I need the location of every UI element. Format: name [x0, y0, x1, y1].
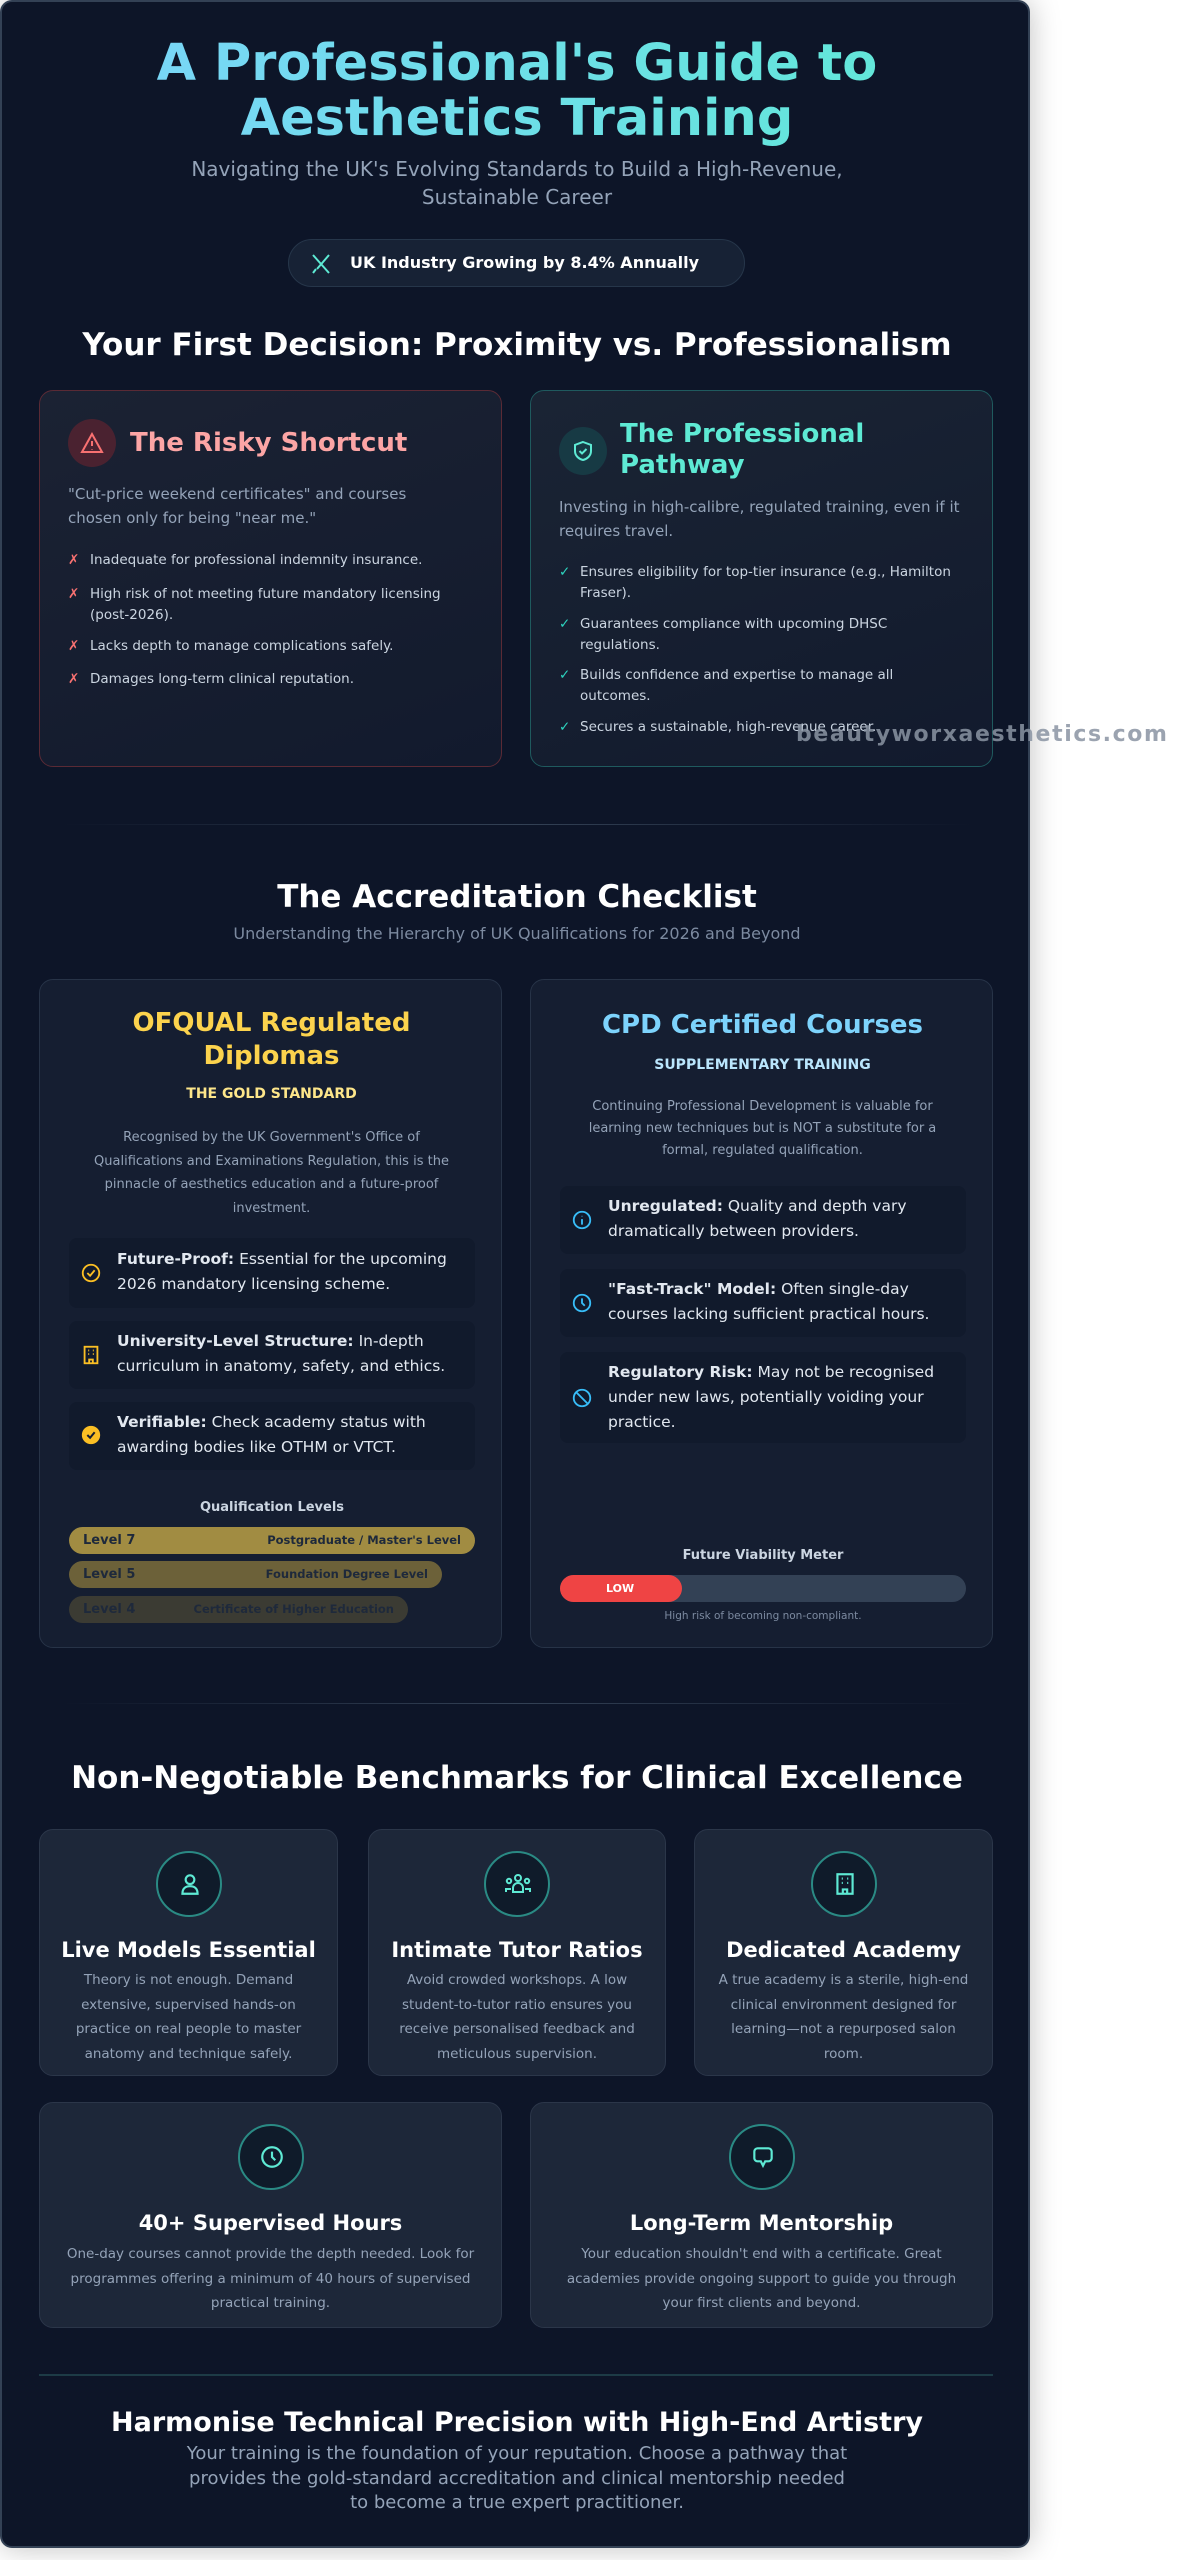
panel: professional pathway: Pathway: [620, 450, 745, 480]
panel: risky shortcut: "Cut-price weekend certificates" and courses chosen only for being "near me.": [68, 485, 406, 527]
feature: regulatory risk: [560, 1352, 966, 1443]
feature: regulatory risk: Regulatory Risk: May not be recognised under new laws, potentially voiding your practice.: [608, 1363, 934, 1431]
list: benefits: Ensures eligibility for top-tier insurance (e.g., Hamilton Fraser).: [580, 564, 951, 601]
list: benefits: ✓: [559, 616, 570, 632]
list: risks: ✗: [68, 586, 79, 602]
badge: industry growth: [288, 239, 745, 287]
footer text: Your training is the foundation of your reputation. Choose a pathway that provides the gold-standard accreditation and clinical mentorship needed to become a true expert practitioner.: [187, 2443, 847, 2513]
chart: qualification levels: Qualification Levels: [200, 1500, 344, 1515]
chart: qualification levels: Foundation Degree Level: [266, 1567, 428, 1581]
icon: shield: [559, 427, 607, 475]
list: risks: Lacks depth to manage complications safely.: [90, 638, 393, 654]
panel: OFQUAL: Diplomas: [204, 1041, 340, 1071]
chart: viability meter: Future Viability Meter: [683, 1548, 843, 1563]
card: mentorship: Your education shouldn't end with a certificate. Great academies provide ongoing support to guide you through your first clients and beyond.: [567, 2246, 956, 2311]
title: A Professional's Guide to: [157, 34, 877, 93]
panel: CPD: Continuing Professional Development is valuable for learning new techniques but is NOT a substitute for a formal, regulated qualification.: [589, 1099, 936, 1158]
panel: professional pathway: Investing in high-calibre, regulated training, even if it requires travel.: [559, 498, 960, 540]
footer heading: Harmonise Technical Precision with High-End Artistry: [111, 2407, 923, 2438]
list: risks: ✗: [68, 638, 79, 654]
chart: qualification levels: Level 5: [83, 1567, 135, 1582]
list: risks: Damages long-term clinical reputation.: [90, 671, 354, 687]
chart: qualification levels: Certificate of Higher Education: [194, 1602, 394, 1616]
list: benefits: ✓: [559, 719, 570, 735]
card: dedicated academy: A true academy is a sterile, high-end clinical environment designed for learning—not a repurposed salon room.: [719, 1972, 968, 2062]
panel: OFQUAL: THE GOLD STANDARD: [186, 1086, 357, 1102]
list: benefits: Secures a sustainable, high-revenue career.: [580, 719, 876, 735]
card: tutor ratios: Intimate Tutor Ratios: [391, 1938, 643, 1962]
heading: first decision: Your First Decision: Proximity vs. Professionalism: [82, 327, 952, 363]
panel: CPD: SUPPLEMENTARY TRAINING: [654, 1057, 871, 1073]
feature: university-level: [69, 1321, 475, 1389]
icon: growth: [312, 254, 330, 274]
panel: CPD: CPD Certified Courses: [602, 1010, 923, 1040]
card: supervised hours: [39, 2102, 502, 2328]
card: mentorship: [530, 2102, 993, 2328]
panel: risky shortcut: The Risky Shortcut: [130, 428, 407, 458]
icon: warning: [68, 419, 116, 467]
heading: accreditation checklist: The Accreditation Checklist: [277, 879, 757, 915]
watermark: beautyworxaesthetics.com: [796, 722, 1169, 747]
panel: CPD: [530, 979, 993, 1648]
list: risks: Inadequate for professional indemnity insurance.: [90, 552, 422, 568]
badge: industry growth: UK Industry Growing by 8.4% Annually: [350, 253, 699, 272]
chart: qualification levels: Level 4: [83, 1602, 135, 1617]
panel: professional pathway: [530, 390, 993, 767]
list: benefits: [559, 564, 951, 735]
feature: verifiable: [69, 1402, 475, 1470]
list: risks: ✗: [68, 552, 79, 568]
panel: OFQUAL: OFQUAL Regulated: [133, 1008, 410, 1038]
list: benefits: Guarantees compliance with upcoming DHSC regulations.: [580, 616, 887, 653]
chart: viability meter: LOW: [606, 1582, 634, 1595]
panel: OFQUAL: [39, 979, 502, 1648]
card: live models: Theory is not enough. Demand extensive, supervised hands-on practice on real people to master anatomy and technique safely.: [76, 1972, 301, 2062]
list: benefits: ✓: [559, 564, 570, 580]
panel: OFQUAL: Recognised by the UK Government's Office of Qualifications and Examinations Regulation, this is the pinnacle of aesthetics education and a future-proof investment.: [94, 1130, 449, 1216]
card: supervised hours: 40+ Supervised Hours: [139, 2211, 402, 2235]
subheading: Understanding the Hierarchy of UK Qualifications for 2026 and Beyond: [233, 924, 801, 943]
card: dedicated academy: Dedicated Academy: [726, 1938, 961, 1962]
feature: verifiable: Verifiable: Check academy status with awarding bodies like OTHM or VTCT.: [117, 1413, 426, 1456]
title: Aesthetics Training: [241, 89, 793, 148]
panel: professional pathway: The Professional: [620, 419, 864, 449]
list: risks: [68, 552, 441, 687]
list: benefits: Builds confidence and expertise to manage all outcomes.: [580, 667, 893, 704]
card: tutor ratios: [368, 1829, 666, 2076]
feature: future-proof: [69, 1238, 475, 1308]
chart: qualification levels: Level 7: [83, 1533, 135, 1548]
feature: fast-track: [560, 1269, 966, 1337]
card: supervised hours: One-day courses cannot provide the depth needed. Look for programmes offering a minimum of 40 hours of supervised practical training.: [67, 2246, 474, 2311]
list: benefits: ✓: [559, 667, 570, 683]
card: tutor ratios: Avoid crowded workshops. A low student-to-tutor ratio ensures you receive personalised feedback and meticulous supervision.: [399, 1972, 635, 2062]
feature: university-level: University-Level Structure: In-depth curriculum in anatomy, safety, and ethics.: [117, 1332, 445, 1375]
card: dedicated academy: [694, 1829, 993, 2076]
heading: benchmarks: Non-Negotiable Benchmarks for Clinical Excellence: [71, 1760, 963, 1796]
subtitle: Sustainable Career: [422, 185, 612, 209]
list: risks: High risk of not meeting future mandatory licensing (post-2026).: [90, 586, 441, 623]
feature: unregulated: [560, 1186, 966, 1254]
title: [2, 36, 1032, 146]
card: mentorship: Long-Term Mentorship: [630, 2211, 893, 2235]
feature: future-proof: Future-Proof: Essential for the upcoming 2026 mandatory licensing scheme.: [117, 1250, 447, 1293]
subtitle: Navigating the UK's Evolving Standards to Build a High-Revenue,: [191, 157, 843, 181]
chart: qualification levels: [69, 1500, 475, 1623]
feature: fast-track: "Fast-Track" Model: Often single-day courses lacking sufficient practical hours.: [608, 1280, 929, 1323]
chart: viability meter: [560, 1548, 966, 1622]
panel: risky shortcut: [39, 390, 502, 767]
chart: viability meter: High risk of becoming non-compliant.: [664, 1610, 862, 1622]
card: live models: [39, 1829, 338, 2076]
chart: qualification levels: Postgraduate / Master's Level: [267, 1533, 461, 1547]
feature: unregulated: Unregulated: Quality and depth vary dramatically between providers.: [608, 1197, 906, 1240]
subtitle: [191, 157, 843, 209]
list: risks: ✗: [68, 671, 79, 687]
card: live models: Live Models Essential: [61, 1938, 316, 1962]
